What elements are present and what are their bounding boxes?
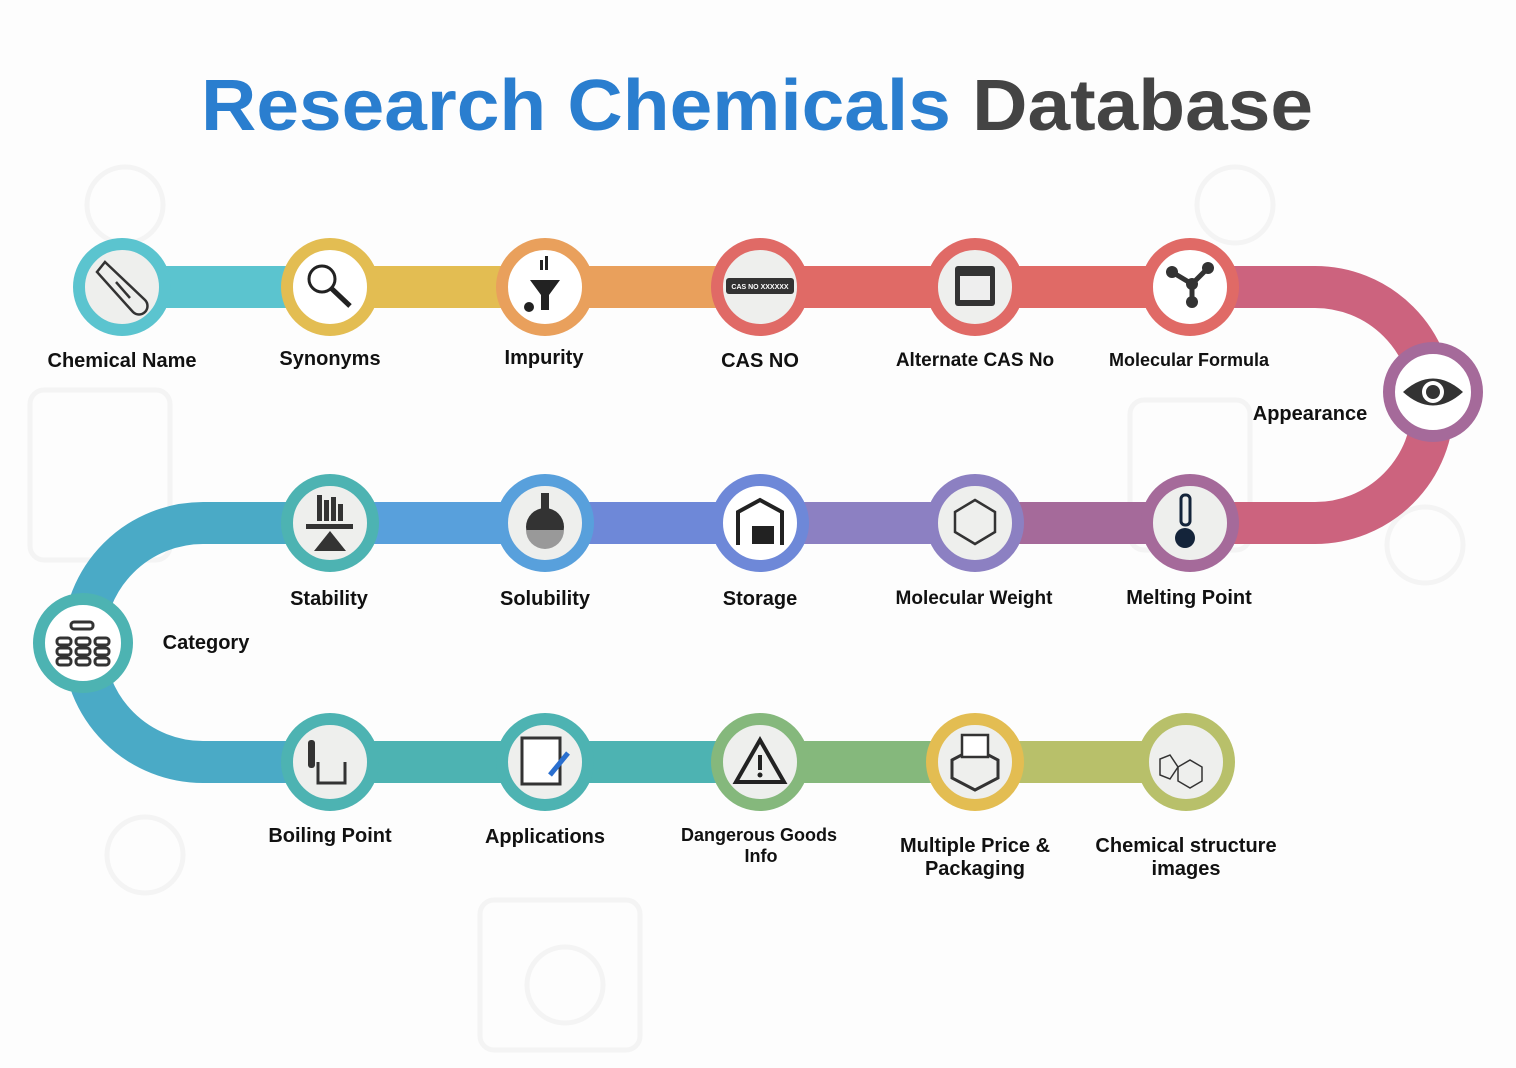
node: CAS NO bbox=[717, 244, 803, 330]
labels: Storage bbox=[723, 588, 797, 610]
labels: Chemical structure bbox=[1095, 835, 1277, 857]
node: Appearance bbox=[1389, 348, 1477, 436]
labels: Multiple Price & bbox=[900, 835, 1050, 857]
node: Category bbox=[39, 599, 127, 687]
node: Melting Point bbox=[1147, 480, 1233, 566]
node: Multiple Price & Packaging bbox=[932, 719, 1018, 805]
title: Research Chemicals Database bbox=[201, 66, 1313, 146]
labels: Melting Point bbox=[1126, 587, 1252, 609]
labels: Molecular Formula bbox=[1109, 350, 1270, 370]
node: Chemical Name bbox=[79, 244, 165, 330]
labels: Synonyms bbox=[279, 348, 381, 370]
node: Storage bbox=[717, 480, 803, 566]
labels: images bbox=[1152, 858, 1220, 880]
node: Molecular Weight bbox=[932, 480, 1018, 566]
nodes bbox=[39, 244, 1477, 805]
node: Molecular Formula bbox=[1147, 244, 1233, 330]
node: Boiling Point bbox=[287, 719, 373, 805]
labels: Impurity bbox=[505, 347, 584, 369]
node: CAS NO: CAS NO XXXXXX bbox=[731, 284, 789, 291]
node: Stability bbox=[287, 480, 373, 566]
labels: Boiling Point bbox=[268, 825, 392, 847]
labels: Dangerous Goods bbox=[681, 825, 837, 845]
labels: Alternate CAS No bbox=[896, 350, 1054, 371]
labels: Solubility bbox=[500, 588, 591, 610]
labels: Info bbox=[744, 846, 778, 866]
labels: Category bbox=[163, 632, 250, 654]
labels: Stability bbox=[290, 588, 369, 610]
node: Impurity bbox=[502, 244, 588, 330]
labels bbox=[48, 347, 1367, 880]
labels: Chemical Name bbox=[48, 350, 196, 372]
node: Dangerous Goods bbox=[717, 719, 803, 805]
labels: CAS NO bbox=[721, 350, 799, 372]
labels: Applications bbox=[485, 826, 605, 848]
labels: Packaging bbox=[925, 858, 1025, 880]
labels: Appearance bbox=[1253, 403, 1367, 425]
node: Chemical structure images bbox=[1143, 719, 1229, 805]
node: Alternate CAS No bbox=[932, 244, 1018, 330]
labels: Molecular Weight bbox=[896, 588, 1053, 609]
road path bbox=[84, 287, 1433, 762]
node: Synonyms bbox=[287, 244, 373, 330]
node: Solubility bbox=[502, 480, 588, 566]
node: Applications bbox=[502, 719, 588, 805]
